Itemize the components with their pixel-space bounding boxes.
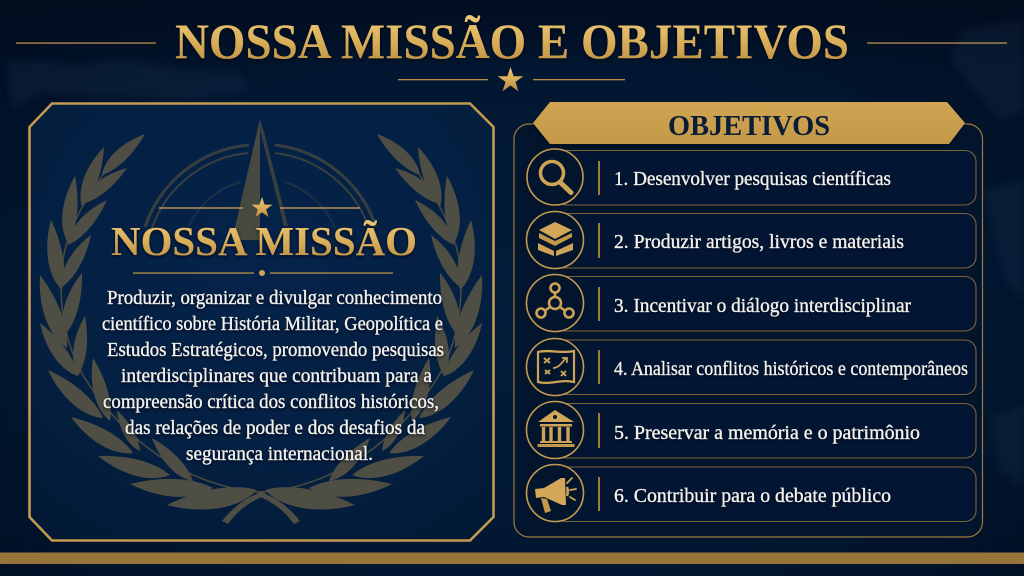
objective 2 (526, 212, 976, 268)
mission text: segurança internacional. (186, 444, 373, 465)
panel: nossa missão (30, 104, 494, 540)
objective 6 text: 6. Contribuir para o debate público (614, 485, 891, 507)
icon: strategy map (526, 338, 584, 396)
emblem: laurel wreath (31, 129, 491, 524)
objective 3 (526, 274, 976, 332)
mission text: interdisciplinares que contribuam para a (121, 366, 432, 387)
objetivos banner: OBJETIVOS (668, 110, 830, 142)
objective 1 text: 1. Desenvolver pesquisas científicas (614, 168, 891, 190)
emblem: compass (145, 119, 376, 240)
objective 3 text: 3. Incentivar o diálogo interdisciplinar (614, 295, 911, 317)
icon: network (526, 274, 584, 332)
mission heading: NOSSA MISSÃO (111, 218, 417, 264)
objective 4 (526, 338, 976, 396)
objective 5 (526, 402, 976, 458)
objective 1 (527, 149, 976, 205)
objective 2 text: 2. Produzir artigos, livros e materiais (614, 231, 904, 253)
icon: museum (526, 402, 584, 458)
title: NOSSA MISSÃO E OBJETIVOS (175, 13, 849, 69)
objective 5 text: 5. Preservar a memória e o patrimônio (614, 422, 920, 444)
mission heading divider (133, 270, 393, 276)
mission heading ornament (159, 197, 360, 217)
icon: magnifying glass (527, 149, 583, 205)
objetivos banner (533, 102, 965, 144)
mission text: Estudos Estratégicos, promovendo pesquisas (107, 340, 444, 361)
panel: objetivos (514, 102, 982, 537)
icon: books (526, 212, 584, 268)
footer band (0, 552, 1024, 564)
mission text (102, 288, 444, 465)
title rule: right (867, 42, 1007, 44)
objective 4 text: 4. Analisar conflitos históricos e contemporâneos (614, 358, 968, 380)
mission text: compreensão crítica dos conflitos históricos, (103, 392, 439, 413)
title ornament with star (398, 67, 625, 91)
mission text: científico sobre História Militar, Geopolítica e (102, 314, 443, 335)
title rule: left (16, 42, 156, 44)
objective 6 (526, 464, 976, 522)
icon: megaphone (526, 464, 584, 522)
mission text: das relações de poder e dos desafios da (125, 418, 425, 439)
mission text: Produzir, organizar e divulgar conhecimento (107, 288, 442, 309)
